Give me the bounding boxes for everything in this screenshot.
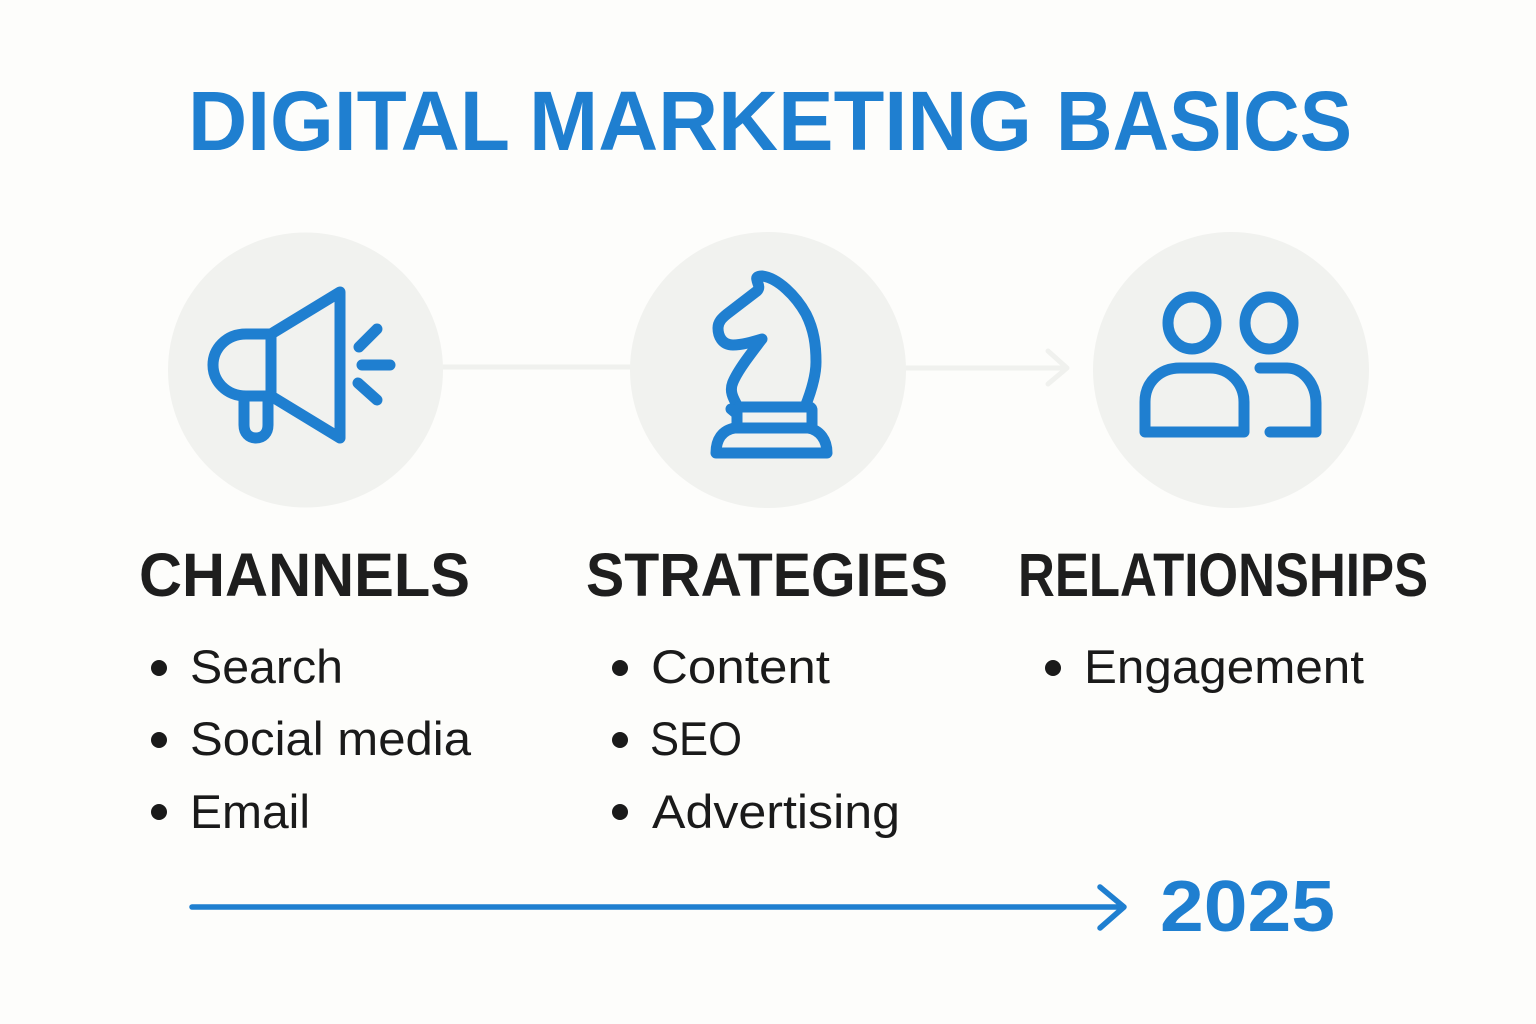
panel: relationships — [1018, 232, 1428, 693]
title: DIGITAL — [188, 74, 510, 168]
heading: relationships: RELATIONSHIPS — [1018, 541, 1428, 609]
heading: channels: CHANNELS — [139, 541, 470, 609]
list: channels: Email — [190, 785, 310, 838]
arrow: strategies to relationships — [903, 351, 1067, 384]
connector: channels to strategies — [440, 364, 634, 370]
timeline arrow — [192, 887, 1124, 928]
list: channels — [151, 640, 472, 838]
title — [188, 74, 1352, 168]
year label: 2025 — [1160, 867, 1335, 947]
list: strategies: SEO — [650, 712, 742, 765]
list: channels: Search — [190, 640, 343, 693]
list: strategies: Advertising — [652, 785, 900, 838]
list: channels: Social media — [190, 712, 472, 765]
title: BASICS — [1056, 74, 1352, 168]
list: strategies: Content — [651, 640, 830, 693]
icon: two people — [1093, 232, 1369, 508]
icon: megaphone — [168, 232, 443, 508]
icon: chess knight — [630, 232, 906, 508]
list: strategies — [612, 640, 900, 838]
title: MARKETING — [529, 74, 1032, 168]
heading: strategies: STRATEGIES — [586, 541, 948, 609]
list: relationships: Engagement — [1084, 640, 1364, 693]
panel: channels — [139, 232, 472, 838]
panel: strategies — [586, 232, 948, 838]
